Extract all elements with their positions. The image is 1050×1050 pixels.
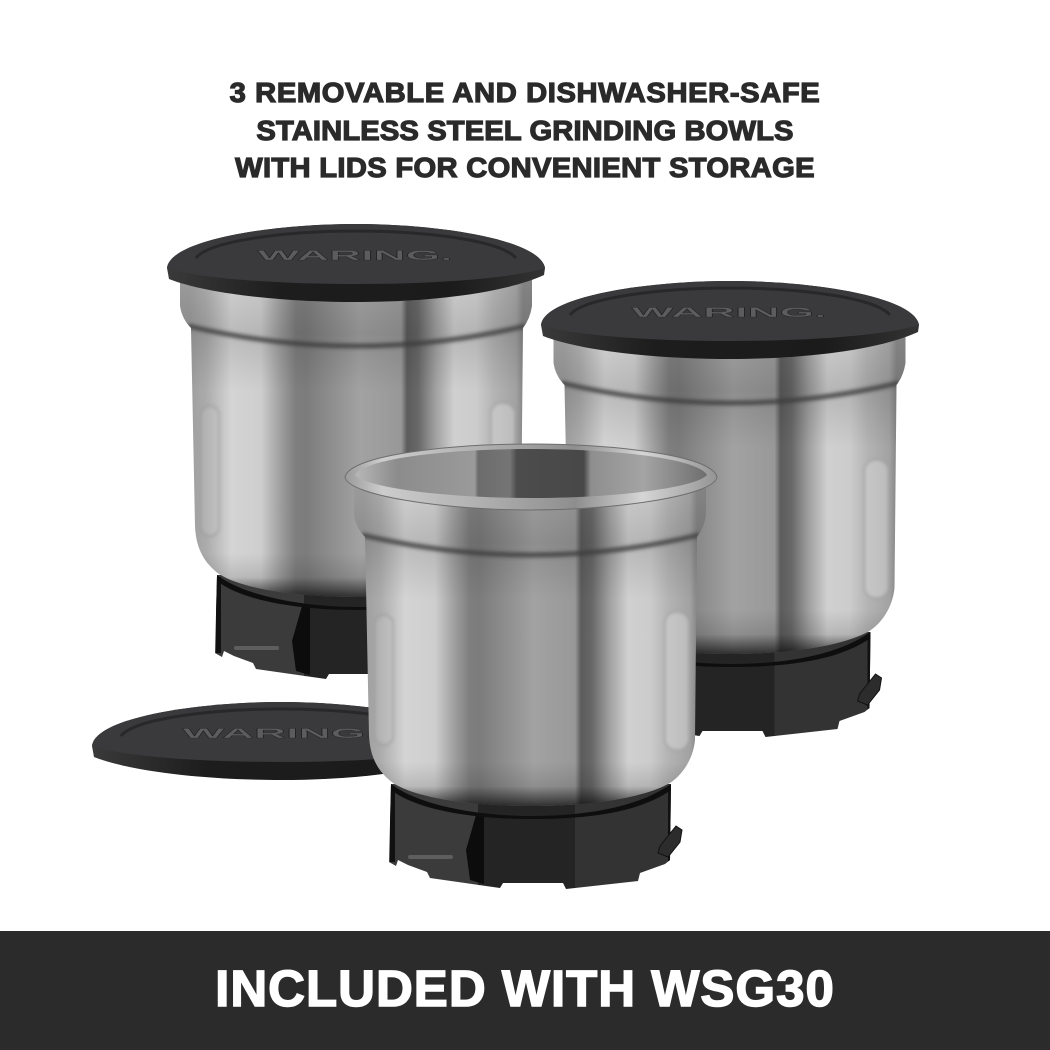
bowl: back right with lid — [541, 281, 919, 740]
bowl: front open — [345, 444, 717, 892]
bowl body and base: back right — [550, 326, 910, 740]
bowl body and base: back left — [176, 269, 536, 683]
title: 3 REMOVABLE AND DISHWASHER-SAFE — [230, 77, 820, 108]
footer text: INCLUDED WITH WSG30 — [215, 960, 835, 1017]
title: WITH LIDS FOR CONVENIENT STORAGE — [235, 152, 815, 183]
rim: front — [345, 444, 717, 510]
product illustration: three bowls and lids — [92, 224, 919, 889]
loose lid — [92, 702, 470, 780]
lid: back right — [541, 281, 919, 359]
bowl: back left with lid — [167, 224, 545, 683]
interior: front — [355, 449, 707, 498]
footer band — [0, 931, 1050, 1050]
lid: back left — [167, 224, 545, 302]
title — [230, 77, 820, 183]
bowl body and base: front — [350, 478, 710, 892]
title: STAINLESS STEEL GRINDING BOWLS — [256, 115, 794, 146]
